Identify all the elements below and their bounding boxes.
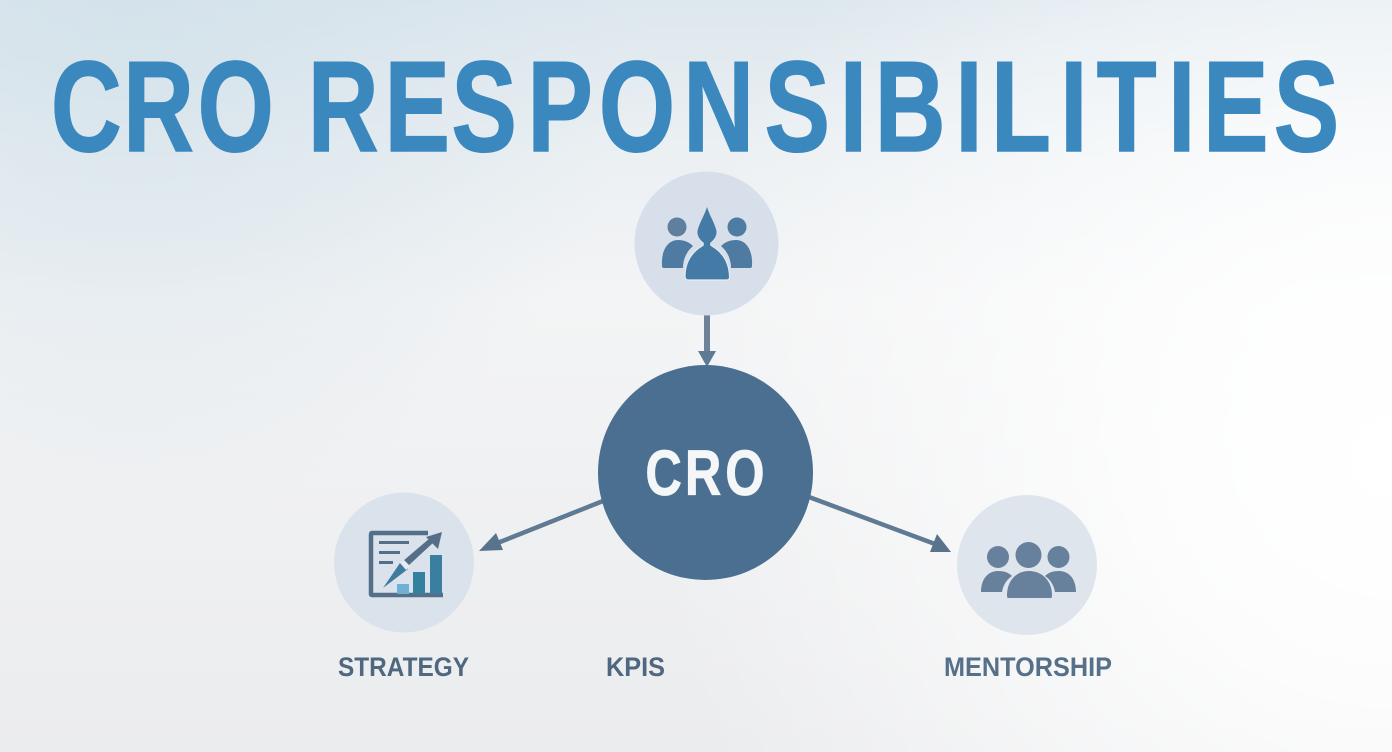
label: mentorship: MENTORSHIP (944, 652, 1112, 682)
icon: three people (981, 542, 1076, 598)
label: strategy: STRATEGY (338, 652, 469, 682)
arrow: CRO to mentorship (809, 497, 951, 552)
arrow: top icon to CRO (698, 315, 716, 367)
arrow: CRO to strategy (479, 501, 603, 551)
title: CRO RESPONSIBILITIES (51, 35, 1339, 179)
central CRO node (598, 365, 813, 580)
icon: team with leader (662, 207, 752, 280)
icon: chart with arrow and pen (371, 532, 443, 595)
top node: leadership (634, 172, 778, 316)
right node: mentorship (957, 495, 1097, 635)
left node: strategy (334, 492, 474, 632)
CRO label: CRO (645, 438, 765, 509)
label: KPIs: KPIS (606, 652, 665, 682)
